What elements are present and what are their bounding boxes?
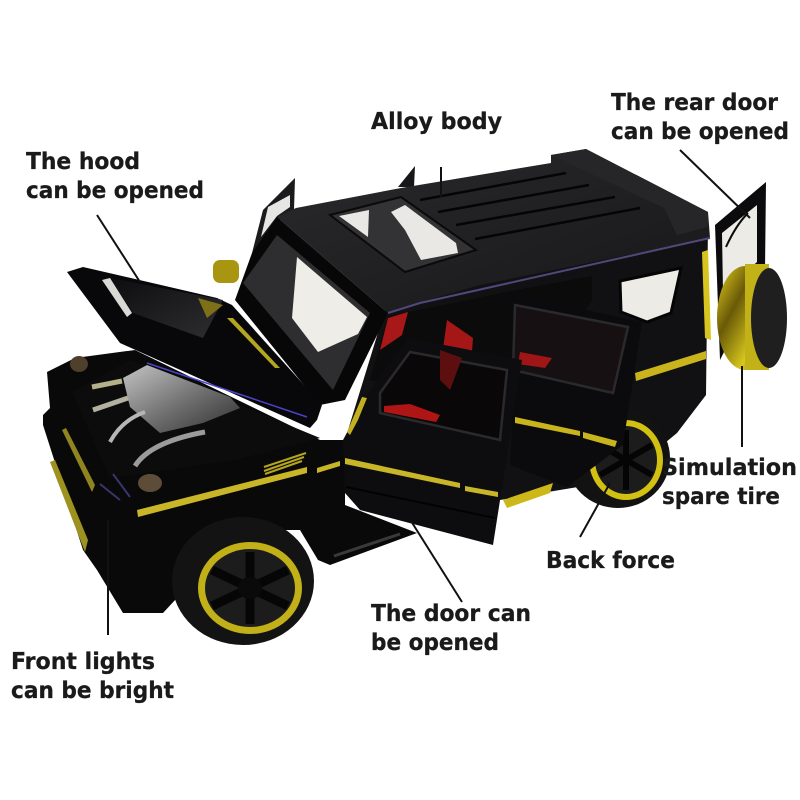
callout: rear door: can be opened [611,119,789,145]
side step [503,483,553,508]
far door [252,178,295,253]
front indicator [138,474,162,492]
callout: door [371,521,531,656]
roof spoiler [551,149,708,235]
sill highlight [334,534,400,556]
rear wheel [566,408,670,508]
callout: spare tire: Simulation [662,455,797,481]
callout: rear door [611,90,789,218]
purple highlights [100,474,130,500]
callout: hood [26,149,204,282]
door mirror mount [347,397,367,435]
callout: back force [546,483,675,574]
model car [43,149,787,645]
callout: front lights [11,520,174,704]
callout: back force: Back force [546,548,675,574]
fender vent [264,453,306,474]
windshield frame [235,217,388,405]
front body [43,350,417,613]
rear door glass [715,182,766,360]
rear pillar gold strip [702,250,711,340]
roof [277,149,710,313]
callout: hood: can be opened [26,178,204,204]
engine [92,365,240,466]
engine bay [72,360,320,478]
sunroof [330,197,476,272]
callout: rear door: The rear door [611,90,779,116]
callout: front lights: Front lights [11,649,155,675]
front wheel [172,517,314,645]
callout: spare tire [662,366,797,510]
spare tire [717,264,787,370]
rear door open [508,293,642,487]
roof lamp [70,356,88,372]
rear body [345,225,708,500]
roof antenna fin [398,166,415,187]
callout: door: The door can [371,601,531,627]
open hood [67,267,322,428]
roof edge highlight [388,238,710,313]
gold body stripe [137,467,307,517]
interior opening [370,276,592,410]
rear quarter window [620,268,681,322]
rear body stripe [635,351,706,381]
callout: hood: The hood [26,149,140,175]
front door open [343,338,522,545]
callout: alloy body [371,109,502,197]
front grille strips [50,428,95,552]
callout: alloy body: Alloy body [371,109,502,135]
callout: front lights: can be bright [11,678,174,704]
callout: door: be opened [371,630,499,656]
side mirror [213,260,239,283]
roof ribs [420,173,640,239]
windshield glass [243,235,370,390]
callout: spare tire: spare tire [662,484,780,510]
